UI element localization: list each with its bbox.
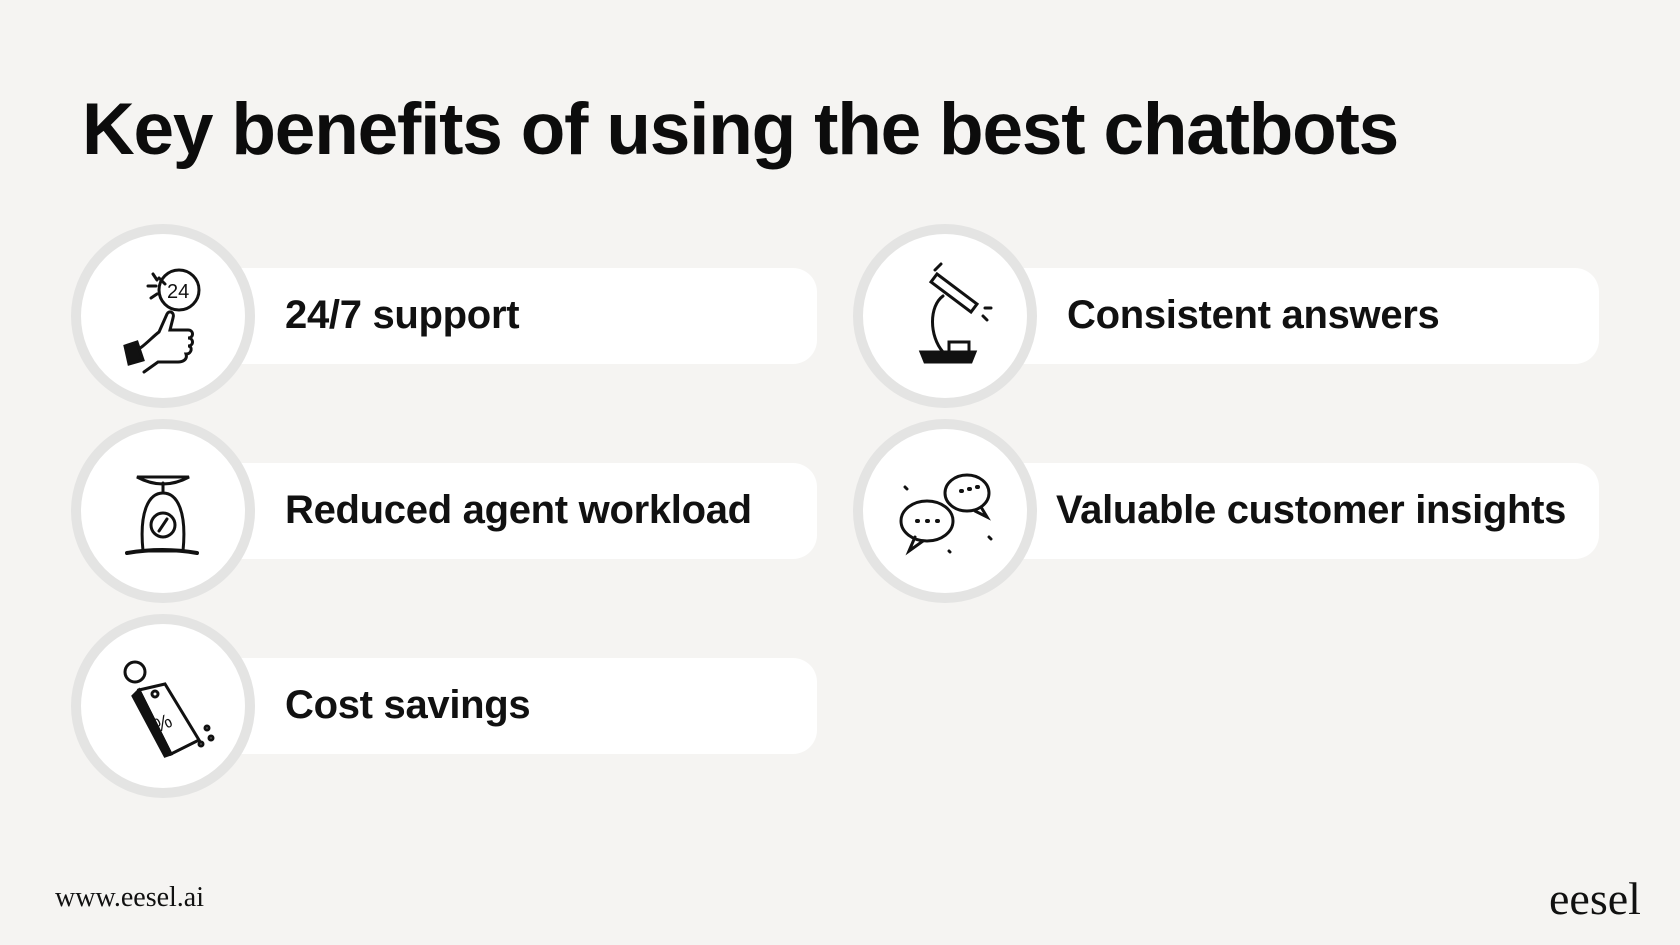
label: Valuable customer insights xyxy=(1056,488,1566,532)
icon: chat bubbles xyxy=(853,419,1037,603)
pill background xyxy=(945,463,1599,559)
panel: Valuable customer insights xyxy=(853,419,1599,603)
icon: kitchen scale xyxy=(71,419,255,603)
panel: Reduced agent workload xyxy=(71,419,817,603)
title: Key benefits of using the best chatbots xyxy=(82,89,1398,170)
panel: Cost savings xyxy=(71,614,817,798)
label: Reduced agent workload xyxy=(285,488,752,532)
icon: thumbs up with 24 clock: 24 xyxy=(167,281,189,303)
label: Cost savings xyxy=(285,683,530,727)
icon: thumbs up with 24 clock xyxy=(71,224,255,408)
pill background xyxy=(163,268,817,364)
footer url: www.eesel.ai xyxy=(55,882,204,913)
icon: microscope xyxy=(853,224,1037,408)
footer logo: eesel xyxy=(1549,873,1641,924)
icon: price tag xyxy=(71,614,255,798)
label: Consistent answers xyxy=(1067,293,1440,337)
panel: Consistent answers xyxy=(853,224,1599,408)
pill background xyxy=(163,463,817,559)
label: 24/7 support xyxy=(285,293,519,337)
pill background xyxy=(163,658,817,754)
panel: 24/7 support xyxy=(71,224,817,408)
icon: price tag: % xyxy=(150,710,176,738)
pill background xyxy=(945,268,1599,364)
